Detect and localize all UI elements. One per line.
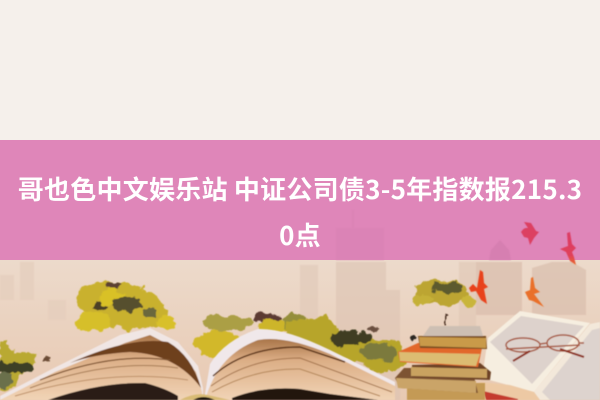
bird: crimson upper — [521, 222, 539, 245]
open book: right with spectacles — [480, 311, 600, 400]
spectacles — [506, 335, 584, 361]
title — [18, 170, 582, 253]
pink title band — [0, 140, 600, 260]
peach lower background — [0, 260, 600, 400]
bird: crimson to orange right — [560, 232, 576, 265]
red bookmark ribbon — [483, 391, 518, 400]
title: 0点 — [279, 216, 321, 253]
tree canopy: left — [73, 275, 174, 337]
title: 哥也色中文娱乐站 中证公司债3-5年指数报215.3 — [18, 170, 582, 207]
open book: left — [0, 328, 395, 400]
stack of books — [395, 326, 491, 400]
bird: orange — [525, 277, 544, 307]
bush: far left — [0, 340, 52, 392]
city skyline — [0, 210, 586, 400]
bird: red-orange — [469, 270, 488, 304]
paper background — [0, 0, 600, 140]
sapling on book stack — [414, 280, 474, 326]
bush: behind book stack — [285, 316, 418, 372]
tree canopy: behind right book page — [194, 313, 307, 358]
